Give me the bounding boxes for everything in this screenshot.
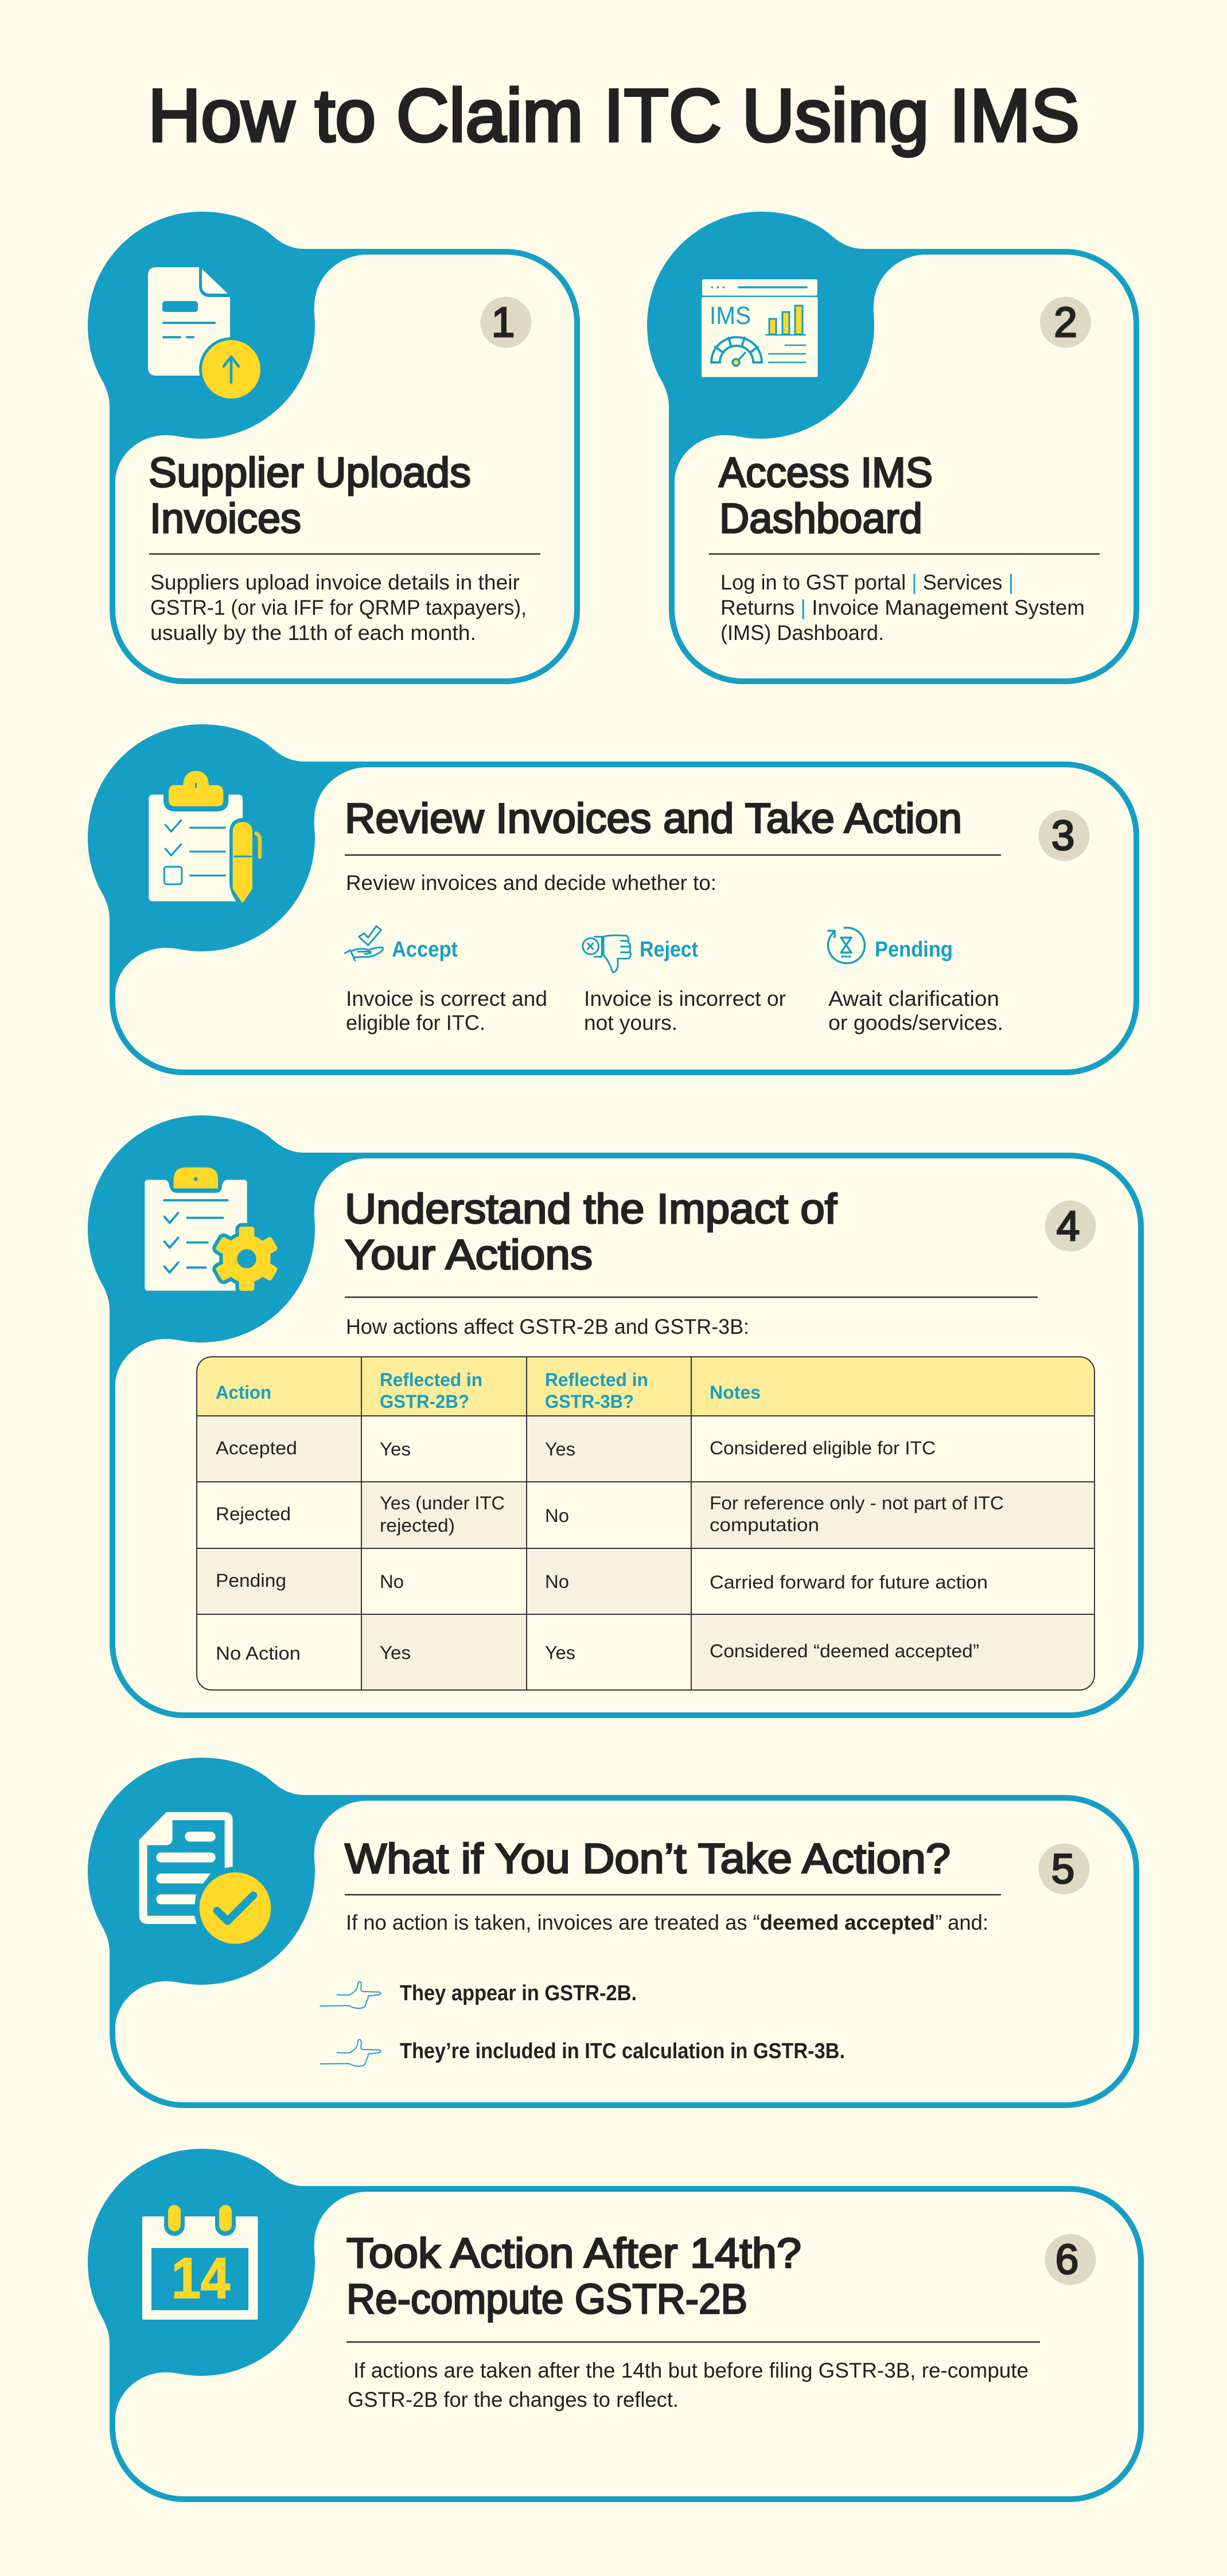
step number 6 xyxy=(1045,2234,1096,2285)
body text 1 xyxy=(150,571,527,645)
table header row: Reflected in xyxy=(380,1369,482,1390)
panel: step 3 review invoices xyxy=(88,724,1139,1075)
step number 5: 5 xyxy=(1051,1846,1074,1892)
table header row: GSTR-2B? xyxy=(380,1391,469,1412)
step number 1: 1 xyxy=(492,299,515,346)
bullet 1: They appear in GSTR-2B. xyxy=(400,1981,637,2005)
table row rejected: rejected) xyxy=(380,1515,455,1536)
body text 1: GSTR-1 (or via IFF for QRMP taxpayers), xyxy=(150,596,527,619)
icon: hand with check xyxy=(345,926,383,961)
table row pending: Pending xyxy=(216,1570,286,1591)
icon: calendar 14: 14 xyxy=(172,2246,230,2310)
icon: hourglass xyxy=(828,928,864,963)
table row accepted: Yes xyxy=(380,1439,411,1459)
table row accepted: Considered eligible for ITC xyxy=(710,1438,936,1458)
table row pending xyxy=(216,1570,988,1593)
card shape 6 xyxy=(88,2149,1144,2502)
icon: pointing hand xyxy=(320,2039,381,2066)
intro text 3: Review invoices and decide whether to: xyxy=(346,871,716,895)
panel: step 2 access IMS dashboard xyxy=(647,212,1139,684)
option: reject xyxy=(583,935,786,1035)
table row accepted: Yes xyxy=(545,1439,575,1459)
heading 6: Took Action After 14th? xyxy=(346,2230,801,2277)
card shape 4 xyxy=(88,1115,1144,1718)
option: reject: Invoice is incorrect or xyxy=(584,987,786,1010)
icon: IMS dashboard window: IMS xyxy=(710,302,751,330)
panel: step 6 recompute xyxy=(88,2149,1144,2502)
body text 2 xyxy=(720,571,1085,645)
heading 1: Invoices xyxy=(150,495,301,542)
option: accept: Accept xyxy=(392,938,458,962)
table row accepted: Accepted xyxy=(216,1438,297,1458)
heading 1 xyxy=(149,450,471,542)
heading 3: Review Invoices and Take Action xyxy=(345,795,962,842)
step number 2: 2 xyxy=(1054,299,1077,346)
icon: document with check badge xyxy=(139,1812,271,1944)
card shape 1 xyxy=(88,212,580,684)
icon: document upload xyxy=(148,267,263,401)
step number 4 xyxy=(1045,1201,1096,1251)
heading 1: Supplier Uploads xyxy=(149,450,471,496)
body text 2: Log in to GST portal | Services | xyxy=(720,571,1014,594)
option: pending: or goods/services. xyxy=(828,1011,1003,1035)
icon: clipboard with gear xyxy=(145,1168,278,1291)
option: pending xyxy=(828,928,1003,1035)
card shape 3 xyxy=(88,724,1139,1075)
body text 2: (IMS) Dashboard. xyxy=(720,621,884,645)
body text 6: If actions are taken after the 14th but before filing GSTR-3B, re-compute xyxy=(353,2359,1029,2382)
step number 3 xyxy=(1038,810,1090,861)
option: pending: Pending xyxy=(875,938,953,962)
body text 1: usually by the 11th of each month. xyxy=(150,621,476,645)
heading 6 xyxy=(346,2230,801,2323)
table row rejected: For reference only - not part of ITC xyxy=(710,1493,1004,1513)
icon: pointing hand xyxy=(320,1981,381,2008)
body text 6: GSTR-2B for the changes to reflect. xyxy=(348,2388,679,2411)
panel: step 4 understand the impact xyxy=(88,1115,1144,1718)
heading 4: Understand the Impact of xyxy=(345,1186,838,1232)
card shape 2 xyxy=(647,212,1139,684)
intro text 5: If no action is taken, invoices are treated as “deemed accepted” and: xyxy=(346,1911,988,1934)
body text 2: Returns | Invoice Management System xyxy=(720,596,1085,619)
table shading xyxy=(197,1357,1094,1690)
table row rejected: No xyxy=(545,1505,569,1526)
option: reject: Reject xyxy=(640,938,698,962)
step number 5 xyxy=(1038,1843,1090,1895)
heading 5: What if You Don’t Take Action? xyxy=(345,1836,951,1882)
bullet 1 xyxy=(320,1981,637,2008)
bullet 2: They’re included in ITC calculation in GSTR-3B. xyxy=(400,2039,845,2063)
step number 2 xyxy=(1040,297,1091,348)
table row rejected: Rejected xyxy=(216,1504,291,1524)
table header row: Notes xyxy=(710,1382,761,1403)
table header row: Reflected in xyxy=(545,1369,648,1390)
table row no action xyxy=(216,1641,979,1664)
step number 3: 3 xyxy=(1051,813,1074,859)
heading 6: Re-compute GSTR-2B xyxy=(346,2276,747,2323)
table row no action: Yes xyxy=(545,1642,575,1663)
icon: clipboard checklist with pen xyxy=(149,771,260,903)
table row no action: No Action xyxy=(216,1643,301,1664)
body text 1: Suppliers upload invoice details in their xyxy=(150,571,520,594)
icon: thumbs down xyxy=(583,935,631,973)
step number 6: 6 xyxy=(1055,2237,1078,2283)
heading 2: Dashboard xyxy=(719,495,922,542)
option: accept: Invoice is correct and xyxy=(346,987,547,1010)
option: accept: eligible for ITC. xyxy=(346,1011,485,1035)
table row rejected: computation xyxy=(710,1515,819,1535)
table row no action: Yes xyxy=(380,1642,411,1663)
table row no action: Considered “deemed accepted” xyxy=(710,1641,979,1661)
panel: step 5 no action xyxy=(88,1758,1139,2108)
option: pending: Await clarification xyxy=(828,987,999,1010)
icon: IMS dashboard window xyxy=(702,279,818,377)
table header row xyxy=(216,1369,761,1412)
heading 2: Access IMS xyxy=(719,450,933,496)
option: reject: not yours. xyxy=(584,1011,677,1035)
heading 4: Your Actions xyxy=(345,1232,593,1278)
step number 1 xyxy=(481,297,531,348)
table: action impact xyxy=(197,1357,1094,1690)
table row rejected: Yes (under ITC xyxy=(380,1493,505,1513)
step number 4: 4 xyxy=(1057,1203,1080,1250)
title: How to Claim ITC Using IMS xyxy=(148,73,1080,157)
table row accepted xyxy=(216,1438,936,1459)
heading 4 xyxy=(345,1186,838,1278)
table row pending: Carried forward for future action xyxy=(710,1572,988,1593)
table header row: GSTR-3B? xyxy=(545,1391,634,1412)
heading 2 xyxy=(719,450,933,542)
card shape 5 xyxy=(88,1758,1139,2108)
table row pending: No xyxy=(545,1571,569,1592)
icon: calendar 14 xyxy=(142,2205,258,2320)
option: accept xyxy=(345,926,547,1035)
panel: step 1 supplier uploads invoices xyxy=(88,212,580,684)
intro text 4: How actions affect GSTR-2B and GSTR-3B: xyxy=(346,1315,749,1338)
table header row: Action xyxy=(216,1382,271,1403)
body text 6 xyxy=(348,2359,1029,2411)
table row pending: No xyxy=(380,1571,404,1592)
table row rejected xyxy=(216,1493,1004,1536)
